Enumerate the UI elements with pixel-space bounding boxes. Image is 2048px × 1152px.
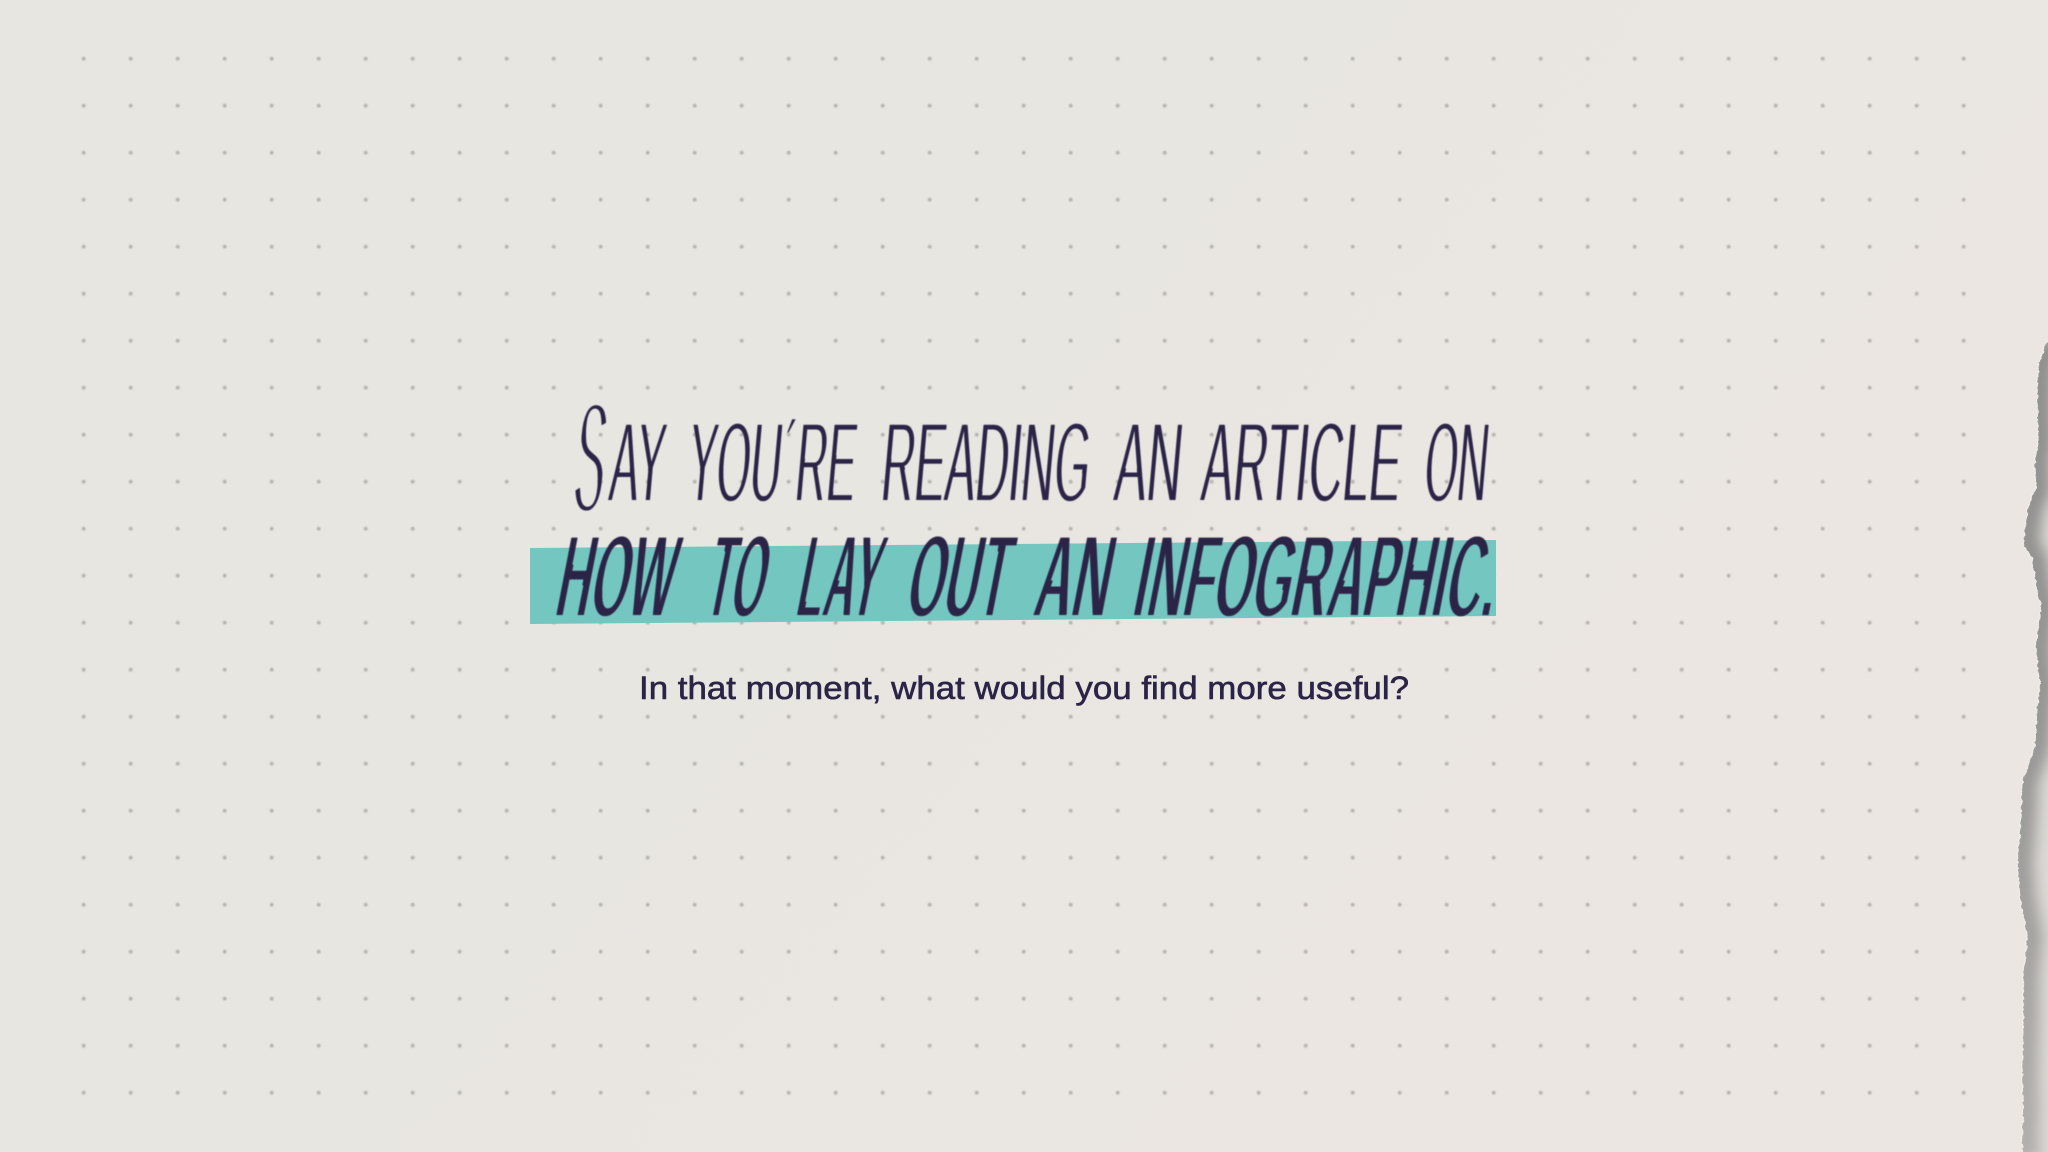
headline line 2: OUT: [898, 508, 1024, 644]
teal highlight stripe: [530, 540, 1496, 624]
text: ON: [1420, 399, 1494, 527]
headline line 1: AN: [1110, 399, 1188, 527]
headline line 1: READING: [877, 399, 1096, 527]
headline line 2: [547, 508, 1513, 644]
headline line 2: TO: [697, 508, 781, 644]
headline line 2: AN: [1025, 508, 1126, 644]
torn paper shadow backing: [1990, 335, 2048, 1152]
headline line 2: HOW: [547, 508, 691, 644]
headline line 2: LAY: [788, 508, 896, 644]
headline line 1: YOU´RE: [683, 399, 862, 527]
headline line 1: ARTICLE: [1197, 399, 1407, 527]
subtitle question: In that moment, what would you find more useful?: [639, 670, 1409, 706]
headline line 1: AY: [605, 399, 671, 527]
text: INFOGRAPHIC.: [1124, 508, 1513, 644]
headline line 1: S: [568, 368, 614, 547]
headline line 1: [568, 368, 1494, 547]
